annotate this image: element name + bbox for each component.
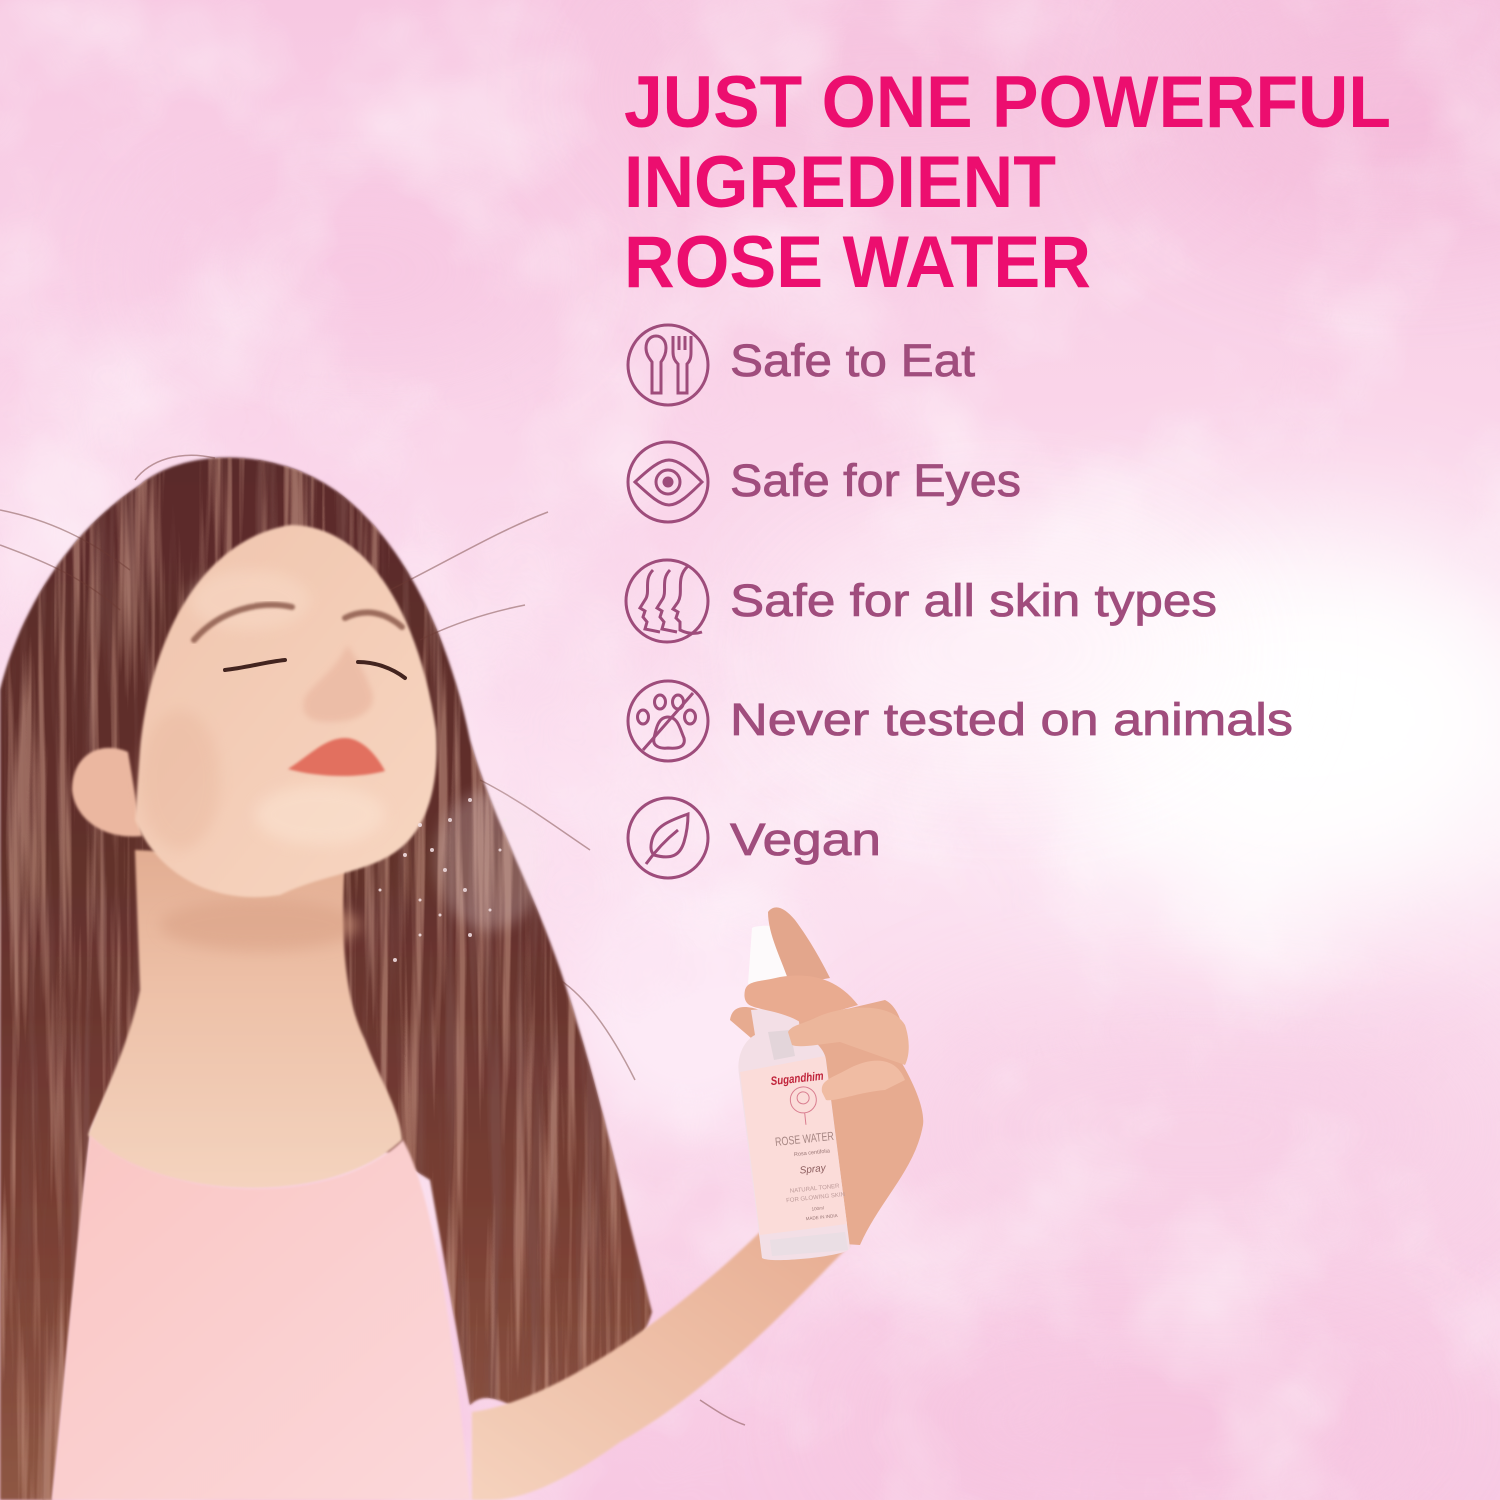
fingers over the bottle (744, 907, 909, 1100)
label: Safe for Eyes (730, 455, 1021, 506)
icon: leaf (628, 798, 708, 878)
icon: three faces (626, 560, 708, 642)
bottle label: FOR GLOWING SKIN (786, 1192, 845, 1204)
middle finger (788, 1008, 909, 1065)
label: Safe to Eat (730, 335, 976, 386)
bottle label (740, 1056, 847, 1235)
face highlights (140, 570, 385, 850)
rose drawing (789, 1086, 819, 1126)
volume text: 100ml (811, 1205, 824, 1212)
brand name: Sugandhim (770, 1069, 824, 1088)
bottle cap (748, 926, 789, 984)
thumb (768, 907, 830, 985)
hair (0, 454, 746, 1500)
toner text: NATURAL TONER (790, 1184, 840, 1195)
water mist (378, 790, 545, 962)
benefit: safe for eyes (628, 442, 1021, 522)
t-shirt (52, 1135, 470, 1500)
eyebrows (194, 605, 402, 640)
bottle glass (738, 1006, 850, 1260)
icon: spoon and fork (628, 325, 708, 405)
label: Vegan (730, 814, 881, 865)
woman spraying rose water (0, 454, 924, 1500)
benefit: vegan (628, 798, 881, 878)
spray text: Spray (799, 1163, 827, 1177)
neck shadow (160, 899, 360, 951)
heading: JUST ONE POWERFUL (624, 62, 1391, 143)
neck and chest (88, 850, 402, 1188)
hand palm and back finger (730, 1000, 923, 1245)
latin name: Rosa centifolia (794, 1148, 831, 1158)
heading: ROSE WATER (624, 222, 1091, 303)
heading (624, 62, 1391, 303)
product name: ROSE WATER (774, 1129, 835, 1149)
icon: eye (628, 442, 708, 522)
label: Never tested on animals (730, 694, 1293, 745)
benefit: safe to eat (628, 325, 976, 405)
face (135, 525, 437, 897)
ear (72, 748, 142, 837)
ring finger (822, 1061, 905, 1100)
rose water spray bottle (738, 926, 850, 1260)
benefit: never tested on animals (628, 681, 1293, 761)
closed eyes (225, 660, 405, 678)
lips (288, 738, 385, 776)
bottle label: MADE IN INDIA (806, 1213, 838, 1221)
label: Safe for all skin types (730, 575, 1217, 626)
index finger (744, 975, 858, 1022)
forearm (472, 1232, 850, 1500)
icon: crossed paw (628, 681, 708, 761)
heading: INGREDIENT (624, 142, 1056, 223)
benefit: safe for all skin types (626, 560, 1217, 642)
